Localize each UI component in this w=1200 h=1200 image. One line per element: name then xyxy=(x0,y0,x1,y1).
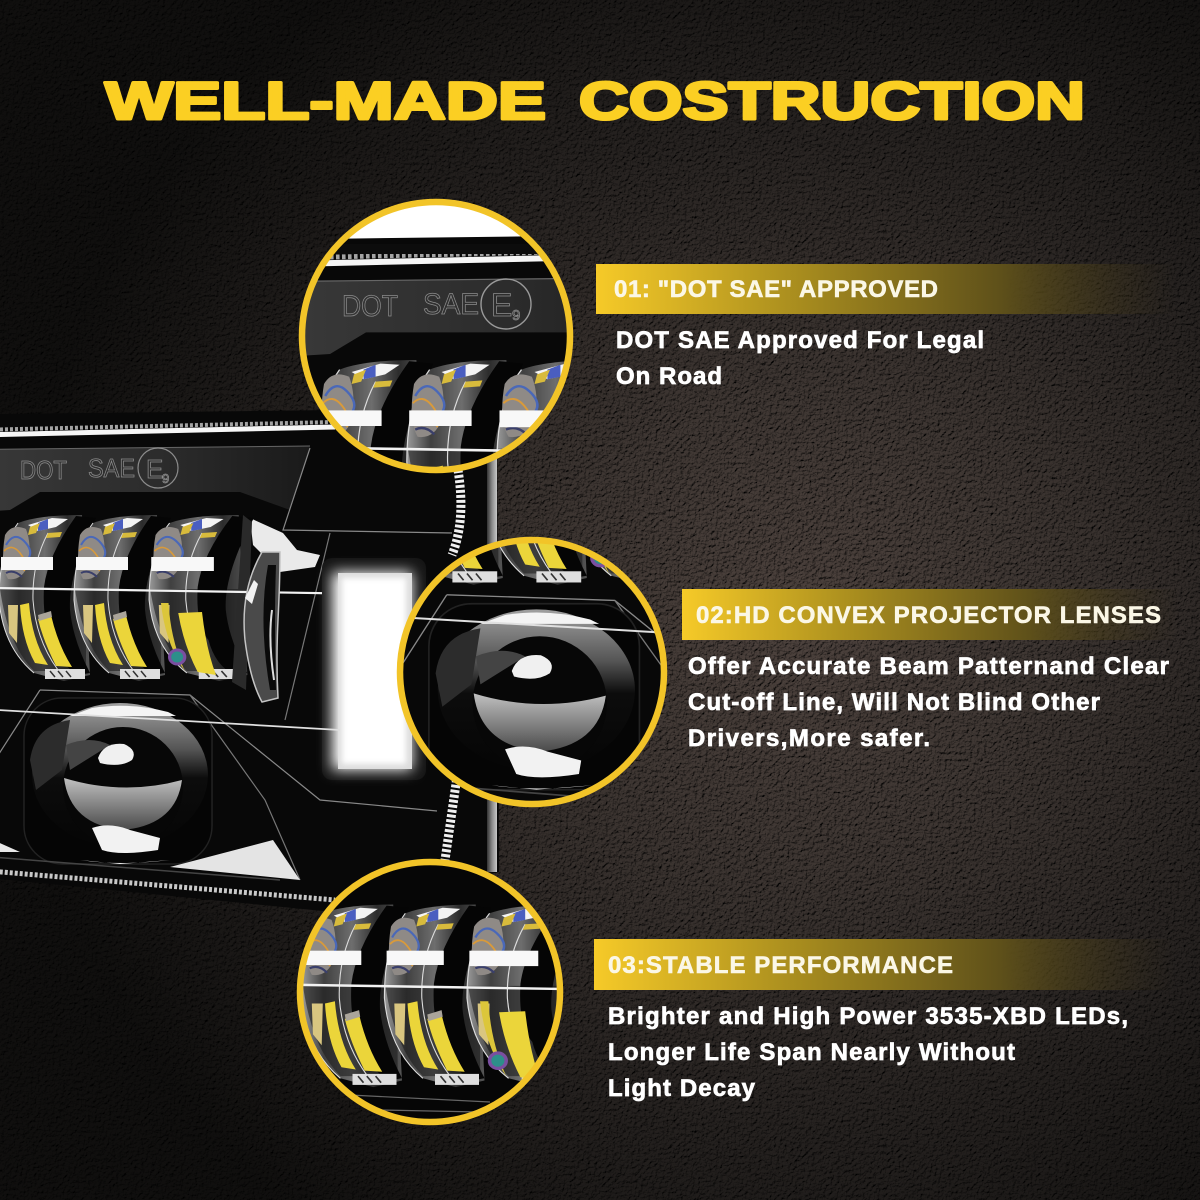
title: WELL-MADE xyxy=(105,72,546,131)
description 1: DOT SAE Approved For Legal xyxy=(616,327,984,354)
description 1: On Road xyxy=(616,363,722,390)
feature 3 xyxy=(594,939,1200,1102)
ring xyxy=(400,540,664,804)
description 3: Brighter and High Power 3535-XBD LEDs, xyxy=(608,1003,1128,1030)
zoom circle 1: DOT SAE mark: 9 xyxy=(512,307,520,324)
description 2: Drivers,More safer. xyxy=(688,725,930,752)
heading 1: 01: "DOT SAE" APPROVED xyxy=(614,276,938,303)
description 2: Cut-off Line, Will Not Blind Other xyxy=(688,689,1100,716)
title: COSTRUCTION xyxy=(579,72,1085,131)
feature 1 xyxy=(596,264,1200,390)
zoom circle 1: DOT SAE mark xyxy=(298,198,574,474)
heading bar 2 xyxy=(682,589,1200,640)
description 2 xyxy=(688,653,1169,752)
embossed DOT SAE E9 mark xyxy=(20,448,178,488)
heading 3: 03:STABLE PERFORMANCE xyxy=(608,952,953,979)
feature 2 xyxy=(682,589,1200,752)
description 1 xyxy=(616,327,984,390)
heading bar 1 xyxy=(596,264,1200,314)
description 3 xyxy=(608,1003,1128,1102)
zoom circle 1: DOT SAE mark: DOT xyxy=(342,290,398,323)
heading bar 3 xyxy=(594,939,1200,990)
description 3: Longer Life Span Nearly Without xyxy=(608,1039,1015,1066)
title xyxy=(105,72,1085,131)
zoom circle 1: DOT SAE mark: SAE xyxy=(423,288,479,321)
heading 2: 02:HD CONVEX PROJECTOR LENSES xyxy=(696,602,1161,629)
zoom circle 2: projector lens xyxy=(396,536,668,808)
embossed DOT SAE E9 mark: E xyxy=(146,454,163,484)
embossed DOT SAE E9 mark: 9 xyxy=(162,471,169,486)
ring xyxy=(300,862,560,1122)
zoom circle 3: LED reflectors xyxy=(296,858,564,1126)
ring xyxy=(302,202,570,470)
embossed DOT SAE E9 mark: SAE xyxy=(88,453,135,483)
headlight product xyxy=(0,408,499,912)
description 3: Light Decay xyxy=(608,1075,756,1102)
description 2: Offer Accurate Beam Patternand Clear xyxy=(688,653,1169,680)
embossed DOT SAE E9 mark: DOT xyxy=(20,455,67,485)
zoom circle 1: DOT SAE mark: E xyxy=(491,287,512,323)
